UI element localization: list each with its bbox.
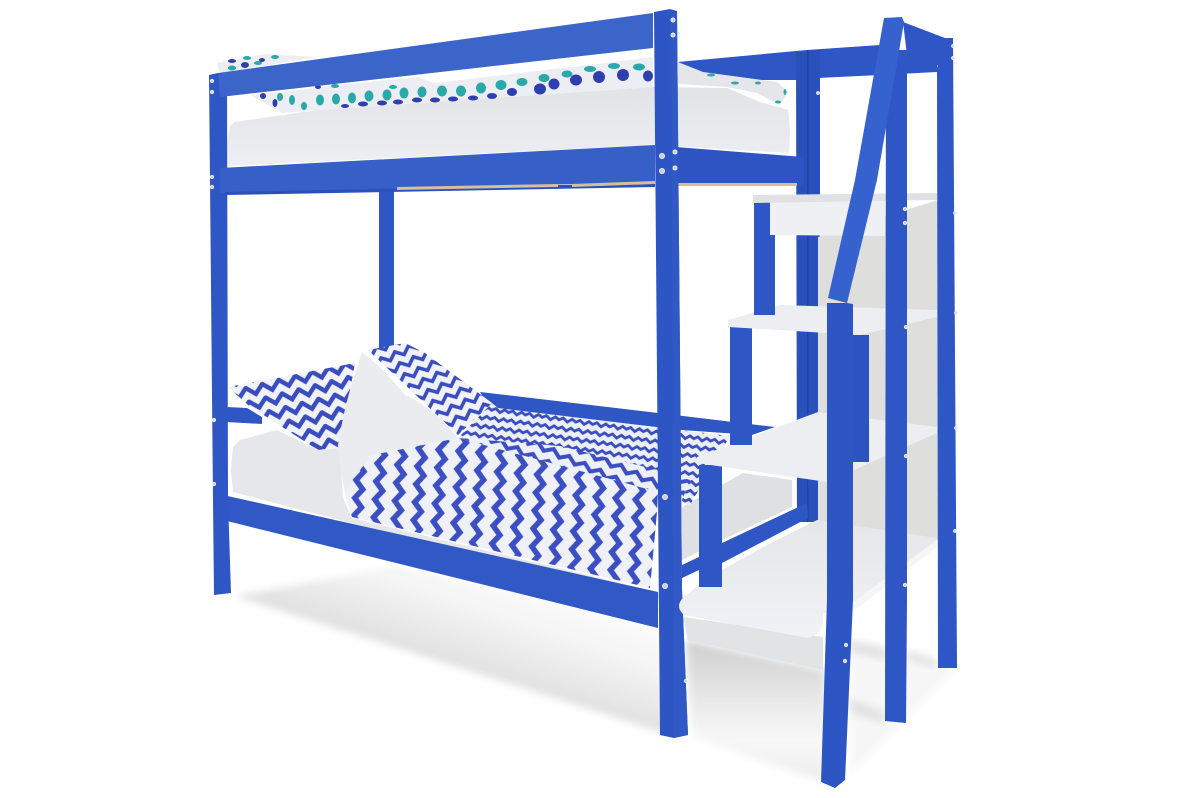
stair handrail [828,17,904,303]
lower front rail [223,495,658,628]
blanket transition band [458,438,690,505]
lower mattress [231,430,660,600]
top side rail [218,13,653,97]
back top rail and back post [678,45,937,522]
stair top rail [903,22,945,68]
stair tread 1 and fascia [753,193,937,236]
right stair post [937,38,957,668]
stair front post [821,303,853,788]
stair tread 2 [728,305,937,335]
bed front right post [654,9,688,738]
upper pillow [217,54,318,73]
left post [209,73,231,595]
stair leg 3 [699,465,722,587]
lower side rail behind stairs [682,503,808,578]
middle side rail [220,145,803,195]
right stair leg [853,335,869,462]
middle stair post [885,50,907,723]
blanket front face [345,438,658,588]
lower left pillow [228,363,355,450]
stair leg 1 [754,202,775,315]
lower back rail [480,392,775,435]
upper mattress [227,87,790,166]
folded sheet [338,352,458,497]
upper polka dot bedding [250,57,653,113]
stair shelf back panel [818,200,938,540]
bolts [210,18,957,683]
bottom stair tread [679,520,937,670]
short left back rail [226,407,262,424]
lower folded pillow flap [368,343,492,435]
upper blanket roll on right [678,62,788,105]
back post lower bunk [379,188,394,350]
stair tread 3 [697,412,937,482]
floor shadow [235,566,960,782]
stair leg 2 [730,327,752,445]
blanket top face [458,403,730,505]
